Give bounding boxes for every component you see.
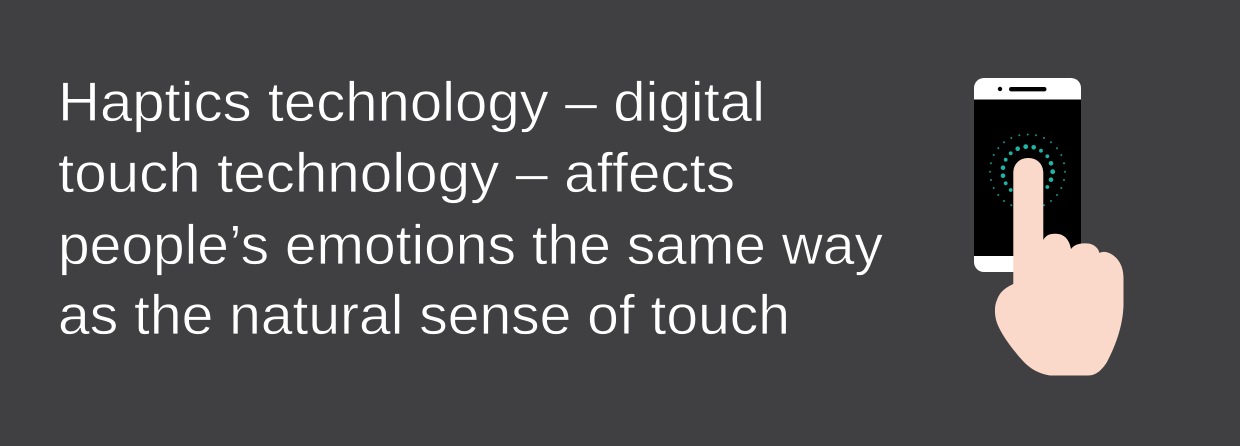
hand xyxy=(995,158,1124,376)
phone body xyxy=(974,78,1081,272)
heading text: Haptics technology – digital xyxy=(58,70,765,133)
icon: phone with touching hand xyxy=(974,78,1124,376)
heading text: as the natural sense of touch xyxy=(58,283,790,346)
outer faint dots xyxy=(989,134,1066,206)
heading text: touch technology – affects xyxy=(58,141,735,204)
touch ripple dots xyxy=(1001,144,1055,192)
heading text xyxy=(58,70,883,346)
heading text: people’s emotions the same way xyxy=(58,213,883,276)
